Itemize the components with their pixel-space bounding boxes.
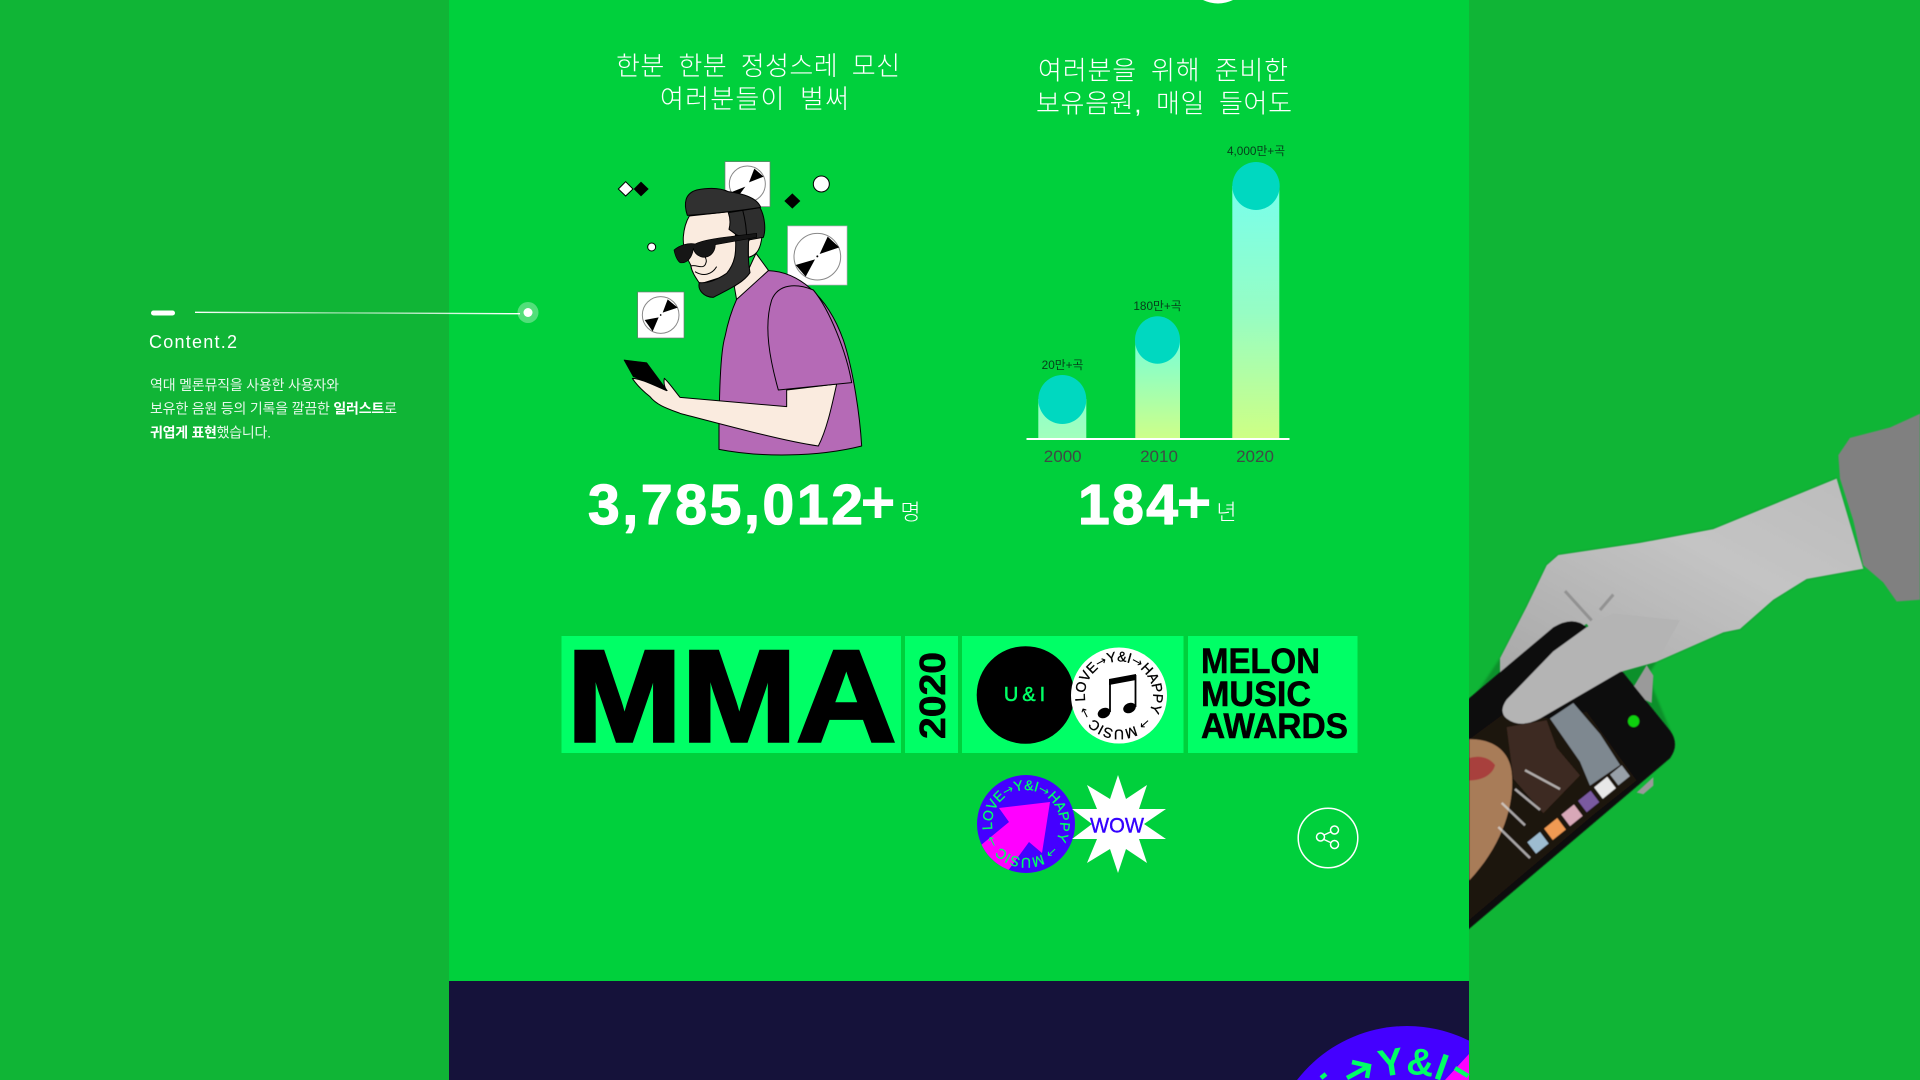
- photo: list text bars: [1498, 770, 1560, 858]
- magenta arrow fragment: [1445, 1054, 1469, 1080]
- annotation description: [150, 377, 397, 440]
- white music sticker: Y&I: [1106, 652, 1132, 663]
- sticker: blue love arrow: MUSIC: [996, 848, 1044, 868]
- ear: [748, 235, 762, 257]
- annotation dash: [151, 310, 175, 316]
- heading: songs: 여러분을 위해 준비한: [1038, 56, 1288, 86]
- sticker: large blue circle cropped in navy section: [1297, 1026, 1470, 1080]
- section annotation: Content.2: [149, 302, 538, 440]
- sticker: WOW starburst: WOW: [1090, 814, 1144, 838]
- banner: 2020: [905, 636, 958, 753]
- sticker: blue love arrow: HAPPY: [1048, 790, 1070, 844]
- sleeve: [768, 286, 852, 390]
- banner: Melon Music Awards: AWARDS: [1201, 707, 1348, 746]
- bar 2020: 2020: [1236, 447, 1274, 466]
- chart baseline: [1026, 438, 1290, 440]
- sticker: blue love arrow: →: [1040, 788, 1048, 794]
- annotation dot with halo: [518, 302, 538, 323]
- banner: MMA: MMA: [567, 623, 896, 769]
- sticker: blue love arrow: [977, 775, 1075, 873]
- stat: users: 3,785,012: [588, 473, 863, 537]
- beard: [699, 235, 750, 297]
- banner: Melon Music Awards: [1188, 636, 1358, 753]
- heading: songs: 보유음원, 매일 들어도: [1036, 88, 1292, 118]
- neck: [734, 253, 769, 300]
- white music sticker: HAPPY: [1140, 662, 1164, 715]
- annotation description: 역대 멜론뮤직을 사용한 사용자와: [150, 377, 339, 393]
- stat: years: 년: [1216, 500, 1237, 525]
- phone photo: [1469, 712, 1637, 920]
- hand shadow: [1478, 478, 1864, 798]
- album thumbnails: [1527, 765, 1630, 854]
- face: [683, 212, 737, 284]
- icon: share button: [1298, 808, 1358, 868]
- heading: users: [616, 51, 900, 114]
- sticker: blue love arrow: LOVE: [982, 790, 1006, 830]
- phone: [624, 360, 667, 391]
- record card: right: [788, 226, 847, 285]
- heading: users: 한분 한분 정성스레 모신: [616, 51, 900, 81]
- white music sticker: MUSIC: [1088, 720, 1138, 740]
- sticker: WOW starburst: [1072, 775, 1166, 873]
- banner: 2020: 2020: [912, 652, 953, 739]
- white music sticker: →: [1082, 708, 1088, 718]
- banner: Melon Music Awards: MELON: [1201, 642, 1320, 681]
- stat: years: [1078, 469, 1237, 537]
- heading: songs: [1036, 56, 1292, 118]
- fingers behind phone: [1630, 665, 1653, 794]
- sticker: blue love arrow: →: [988, 837, 995, 846]
- photo: hair shading: [1507, 720, 1580, 813]
- illustration: man with phone and records: [618, 162, 862, 455]
- bar 2000: 2000: [1044, 447, 1082, 466]
- sunglasses: [674, 233, 757, 263]
- stat: users: 명: [900, 500, 921, 525]
- banner: U&I and music sticker: [962, 636, 1184, 753]
- annotation description: 보유한 음원 등의 기록을 깔끔한 일러스트로: [150, 400, 397, 416]
- white music sticker: LOVE: [1075, 662, 1098, 701]
- photo: lips: [1469, 757, 1495, 781]
- heading: users: 여러분들이 벌써: [660, 84, 849, 114]
- sticker: blue love arrow: →: [1048, 848, 1056, 856]
- icon: magenta arrow: [982, 802, 1050, 870]
- sticker: blue love arrow: Y&I: [1012, 780, 1039, 792]
- sleeve cuff: [1838, 414, 1920, 601]
- top hair: [685, 188, 761, 215]
- side hair: [728, 208, 765, 240]
- stat: years: +: [1176, 469, 1212, 536]
- panel: green content column: [449, 0, 1469, 982]
- black U&I circle: U&I: [1004, 684, 1049, 706]
- black U&I circle: [977, 646, 1074, 744]
- white music sticker: →: [1132, 659, 1142, 666]
- stat: years: 184: [1078, 473, 1178, 537]
- partial white sticker at top edge: [1203, 0, 1233, 4]
- bar 2020: 4,000만+곡: [1227, 144, 1285, 158]
- bar 2000: [1038, 358, 1086, 466]
- white music sticker: →: [1140, 720, 1148, 728]
- thumb: [1502, 613, 1680, 724]
- arm: [632, 378, 837, 446]
- photo: light backdrop: [1550, 703, 1620, 786]
- banner: Melon Music Awards: MUSIC: [1201, 675, 1311, 714]
- image: hand holding phone: [1463, 414, 1920, 934]
- sticker: blue love arrow: →: [1004, 786, 1012, 793]
- white music sticker: [1071, 648, 1167, 744]
- photo: face: [1469, 739, 1512, 880]
- bar chart: songs per year: [1026, 144, 1290, 466]
- finger creases: [1565, 591, 1613, 620]
- record card: top: [725, 162, 770, 207]
- decorative diamonds and dots: [618, 176, 829, 251]
- record card: left: [638, 292, 684, 338]
- stat: users: +: [860, 469, 896, 536]
- panel: navy next section: [449, 981, 1469, 1080]
- green arrows: [1321, 1062, 1468, 1078]
- bar 2010: 2010: [1140, 447, 1178, 466]
- white music sticker: →: [1096, 658, 1106, 664]
- annotation description: 귀엽게 표현했습니다.: [150, 424, 271, 440]
- face lines: [691, 210, 747, 274]
- bar 2010: 180만+곡: [1133, 299, 1182, 313]
- phone body: [1463, 621, 1675, 934]
- t-shirt: [719, 271, 862, 455]
- annotation heading: Content.2: [149, 332, 237, 352]
- icon: music notes: [1096, 674, 1138, 720]
- annotation leader line: [195, 312, 520, 314]
- hand and wrist: [1500, 479, 1863, 675]
- bar 2000: 20만+곡: [1042, 358, 1084, 372]
- bar 2020: [1227, 144, 1285, 466]
- bar 2010: [1133, 299, 1182, 466]
- phone green dot: [1628, 715, 1639, 727]
